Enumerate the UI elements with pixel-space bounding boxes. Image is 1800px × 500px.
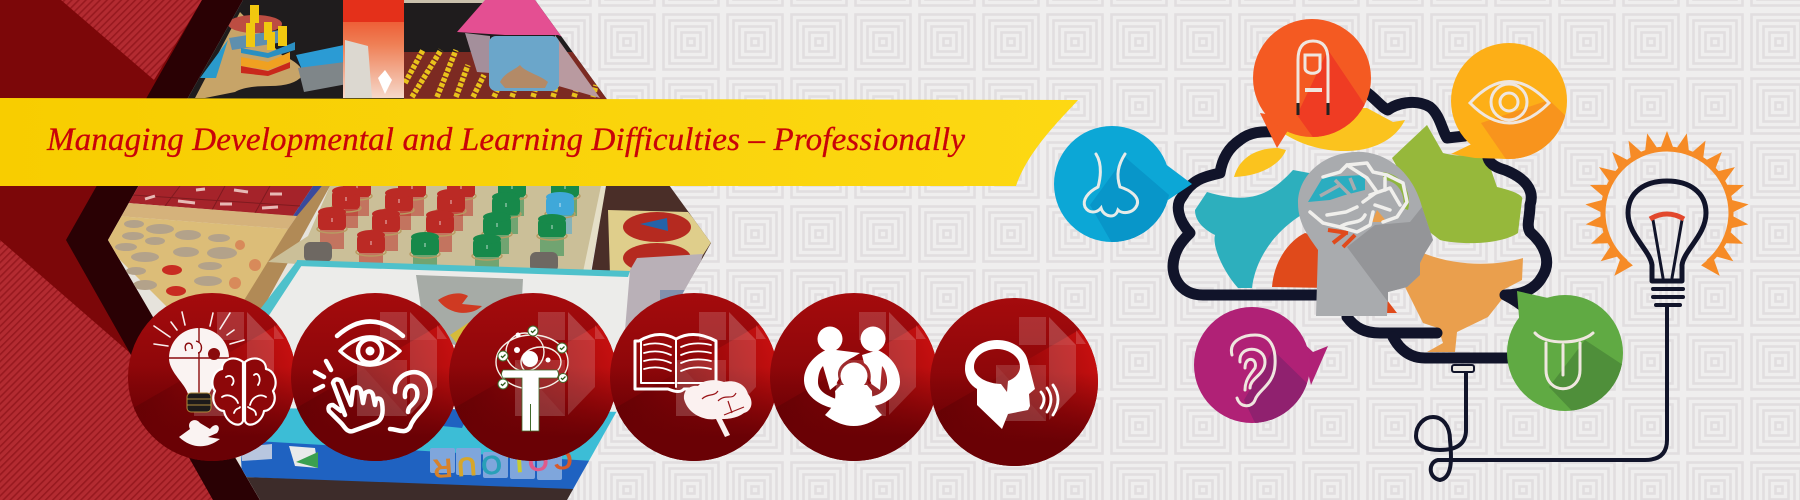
red peg mat with yellow spikes xyxy=(404,50,614,100)
speech bubble: nose xyxy=(1054,126,1192,245)
cream shape board with discs xyxy=(608,210,712,275)
upside-down printed lettering: COLOUR xyxy=(432,444,574,484)
light bulb with sun rays and cord xyxy=(1416,131,1749,480)
wooden frame and yellow hole board xyxy=(100,186,330,310)
icon circle: family group xyxy=(770,293,938,461)
speech bubble: tongue xyxy=(1507,291,1626,412)
sorting box with white compartments xyxy=(240,254,703,500)
yellow title banner xyxy=(0,98,1078,186)
blue and grey container xyxy=(296,45,347,92)
box front with teal and blue bands xyxy=(240,408,640,500)
title text: Managing Developmental and Learning Difficulties – Professionally xyxy=(46,122,965,158)
red, green and blue pegs xyxy=(304,186,581,269)
speech bubble: eye xyxy=(1451,43,1570,165)
icon circle: talking head xyxy=(930,298,1098,466)
sensory cloud illustration xyxy=(1054,19,1749,480)
beige peg board xyxy=(268,186,712,280)
pink tub and blue box xyxy=(457,0,600,98)
icon circle: open book and brain xyxy=(610,293,778,461)
speech bubble: finger xyxy=(1253,19,1375,148)
photo of developmental toys in hexagon xyxy=(100,0,720,500)
icon circle: eye, touch and ear xyxy=(291,293,459,461)
wooden stacking toy xyxy=(195,5,303,98)
speech bubble: ear xyxy=(1194,307,1328,425)
red tile board xyxy=(128,186,322,217)
left red chevron panel xyxy=(0,0,270,500)
icon circle: person with orbits xyxy=(449,293,617,461)
cloud outline xyxy=(1173,92,1547,358)
spray can xyxy=(343,0,404,98)
head silhouette with brain xyxy=(1298,152,1433,316)
icon circle: puzzle bulb and brain xyxy=(128,293,296,461)
coloured cloud shapes xyxy=(1195,108,1523,352)
